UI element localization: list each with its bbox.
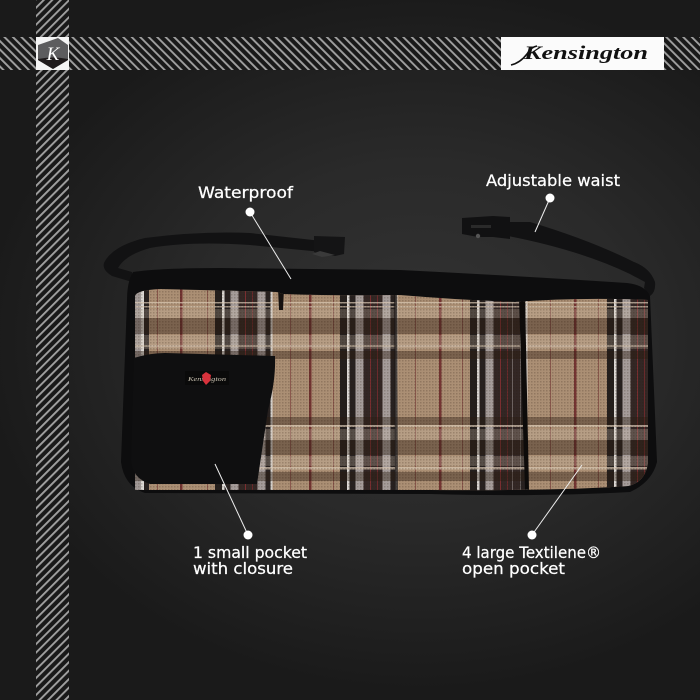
left vertical stripe band (36, 0, 69, 700)
brand logo: Kensington (501, 37, 664, 70)
thin red stripes (157, 285, 599, 495)
product: waist apron (104, 216, 664, 495)
left waist strap with buckle (104, 233, 345, 282)
callout: Waterproof (198, 183, 293, 279)
callout: Adjustable waist: Adjustable waist (486, 171, 620, 190)
header stripe band (0, 37, 700, 70)
brand logo: Kensington: Kensington (523, 43, 648, 64)
pocket pleats (278, 288, 529, 490)
right waist strap with buckle (462, 216, 655, 296)
small black pocket with closure (131, 353, 275, 484)
apron body (121, 268, 657, 495)
fabric weave (130, 285, 655, 495)
icon: K shield logo: K (46, 44, 61, 65)
pocket brand label: Kensington (187, 376, 226, 383)
callout: large Textilene pockets: 4 large Textilene® (462, 543, 601, 562)
callout: large Textilene pockets: open pocket (462, 559, 565, 578)
callout: small pocket (193, 464, 307, 578)
horizontal light bands (130, 302, 655, 470)
horizontal dark bands (130, 318, 655, 481)
callout: Waterproof: Waterproof (198, 183, 293, 202)
pocket brand label (185, 371, 229, 385)
plaid fabric pockets (130, 285, 664, 495)
callout: Adjustable waist (486, 171, 620, 232)
callout: large Textilene pockets (462, 465, 601, 578)
callout: small pocket: with closure (193, 559, 293, 578)
dark checks edge band (135, 285, 149, 495)
callout: small pocket: 1 small pocket (193, 543, 307, 562)
icon: K shield logo (36, 37, 69, 70)
